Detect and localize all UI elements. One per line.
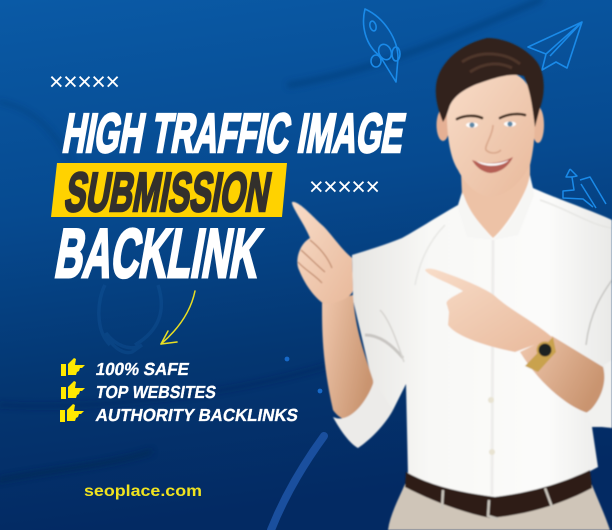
left sleeve cuff (333, 381, 393, 448)
decorations: crosses middle: ××××× (309, 173, 380, 201)
website url: seoplace.com (84, 483, 202, 500)
shirt collar (458, 175, 534, 240)
icon: paper plane (528, 22, 582, 70)
icon: thumb 1 (61, 358, 85, 376)
left forearm (322, 295, 373, 421)
shirt folds (365, 200, 612, 495)
ear left (436, 109, 450, 141)
title highlight: submission: SUBMISSION (61, 161, 276, 223)
icon: growth chart arrow (563, 169, 606, 208)
trousers (388, 484, 610, 530)
decorative dots and arc (271, 357, 324, 530)
smile (472, 157, 513, 173)
right forearm (520, 336, 604, 413)
icon: rocket outline (364, 9, 400, 82)
left hand pointing (292, 202, 353, 304)
belt buckle (442, 488, 552, 519)
bullet text: 100% safe: 100% SAFE (94, 359, 191, 379)
man figure (292, 38, 612, 530)
title line: backlink: BACKLINK (50, 214, 267, 292)
icon: thumb 3 (60, 404, 84, 422)
title highlight: submission (51, 161, 287, 223)
hair (436, 38, 544, 127)
right sleeve cuff (586, 360, 612, 428)
nose (486, 125, 501, 153)
eyes (466, 121, 516, 128)
face (447, 72, 535, 197)
decorations: crosses top: ××××× (49, 68, 120, 96)
arrow: yellow curved (161, 291, 195, 344)
icon: thumb 2 (61, 381, 85, 399)
bullet text: top websites: TOP WEBSITES (94, 382, 218, 402)
bullet list (60, 358, 300, 425)
neck (461, 160, 530, 238)
shirt buttons (488, 397, 495, 455)
right hand pointing (425, 269, 553, 352)
ear right (532, 107, 544, 143)
icon: faint lightbulb (99, 285, 161, 353)
wristwatch (525, 337, 556, 372)
belt (405, 470, 592, 518)
bullet text: authority backlinks: AUTHORITY BACKLINKS (94, 405, 300, 425)
eyebrows (457, 114, 525, 119)
shirt (352, 176, 612, 498)
